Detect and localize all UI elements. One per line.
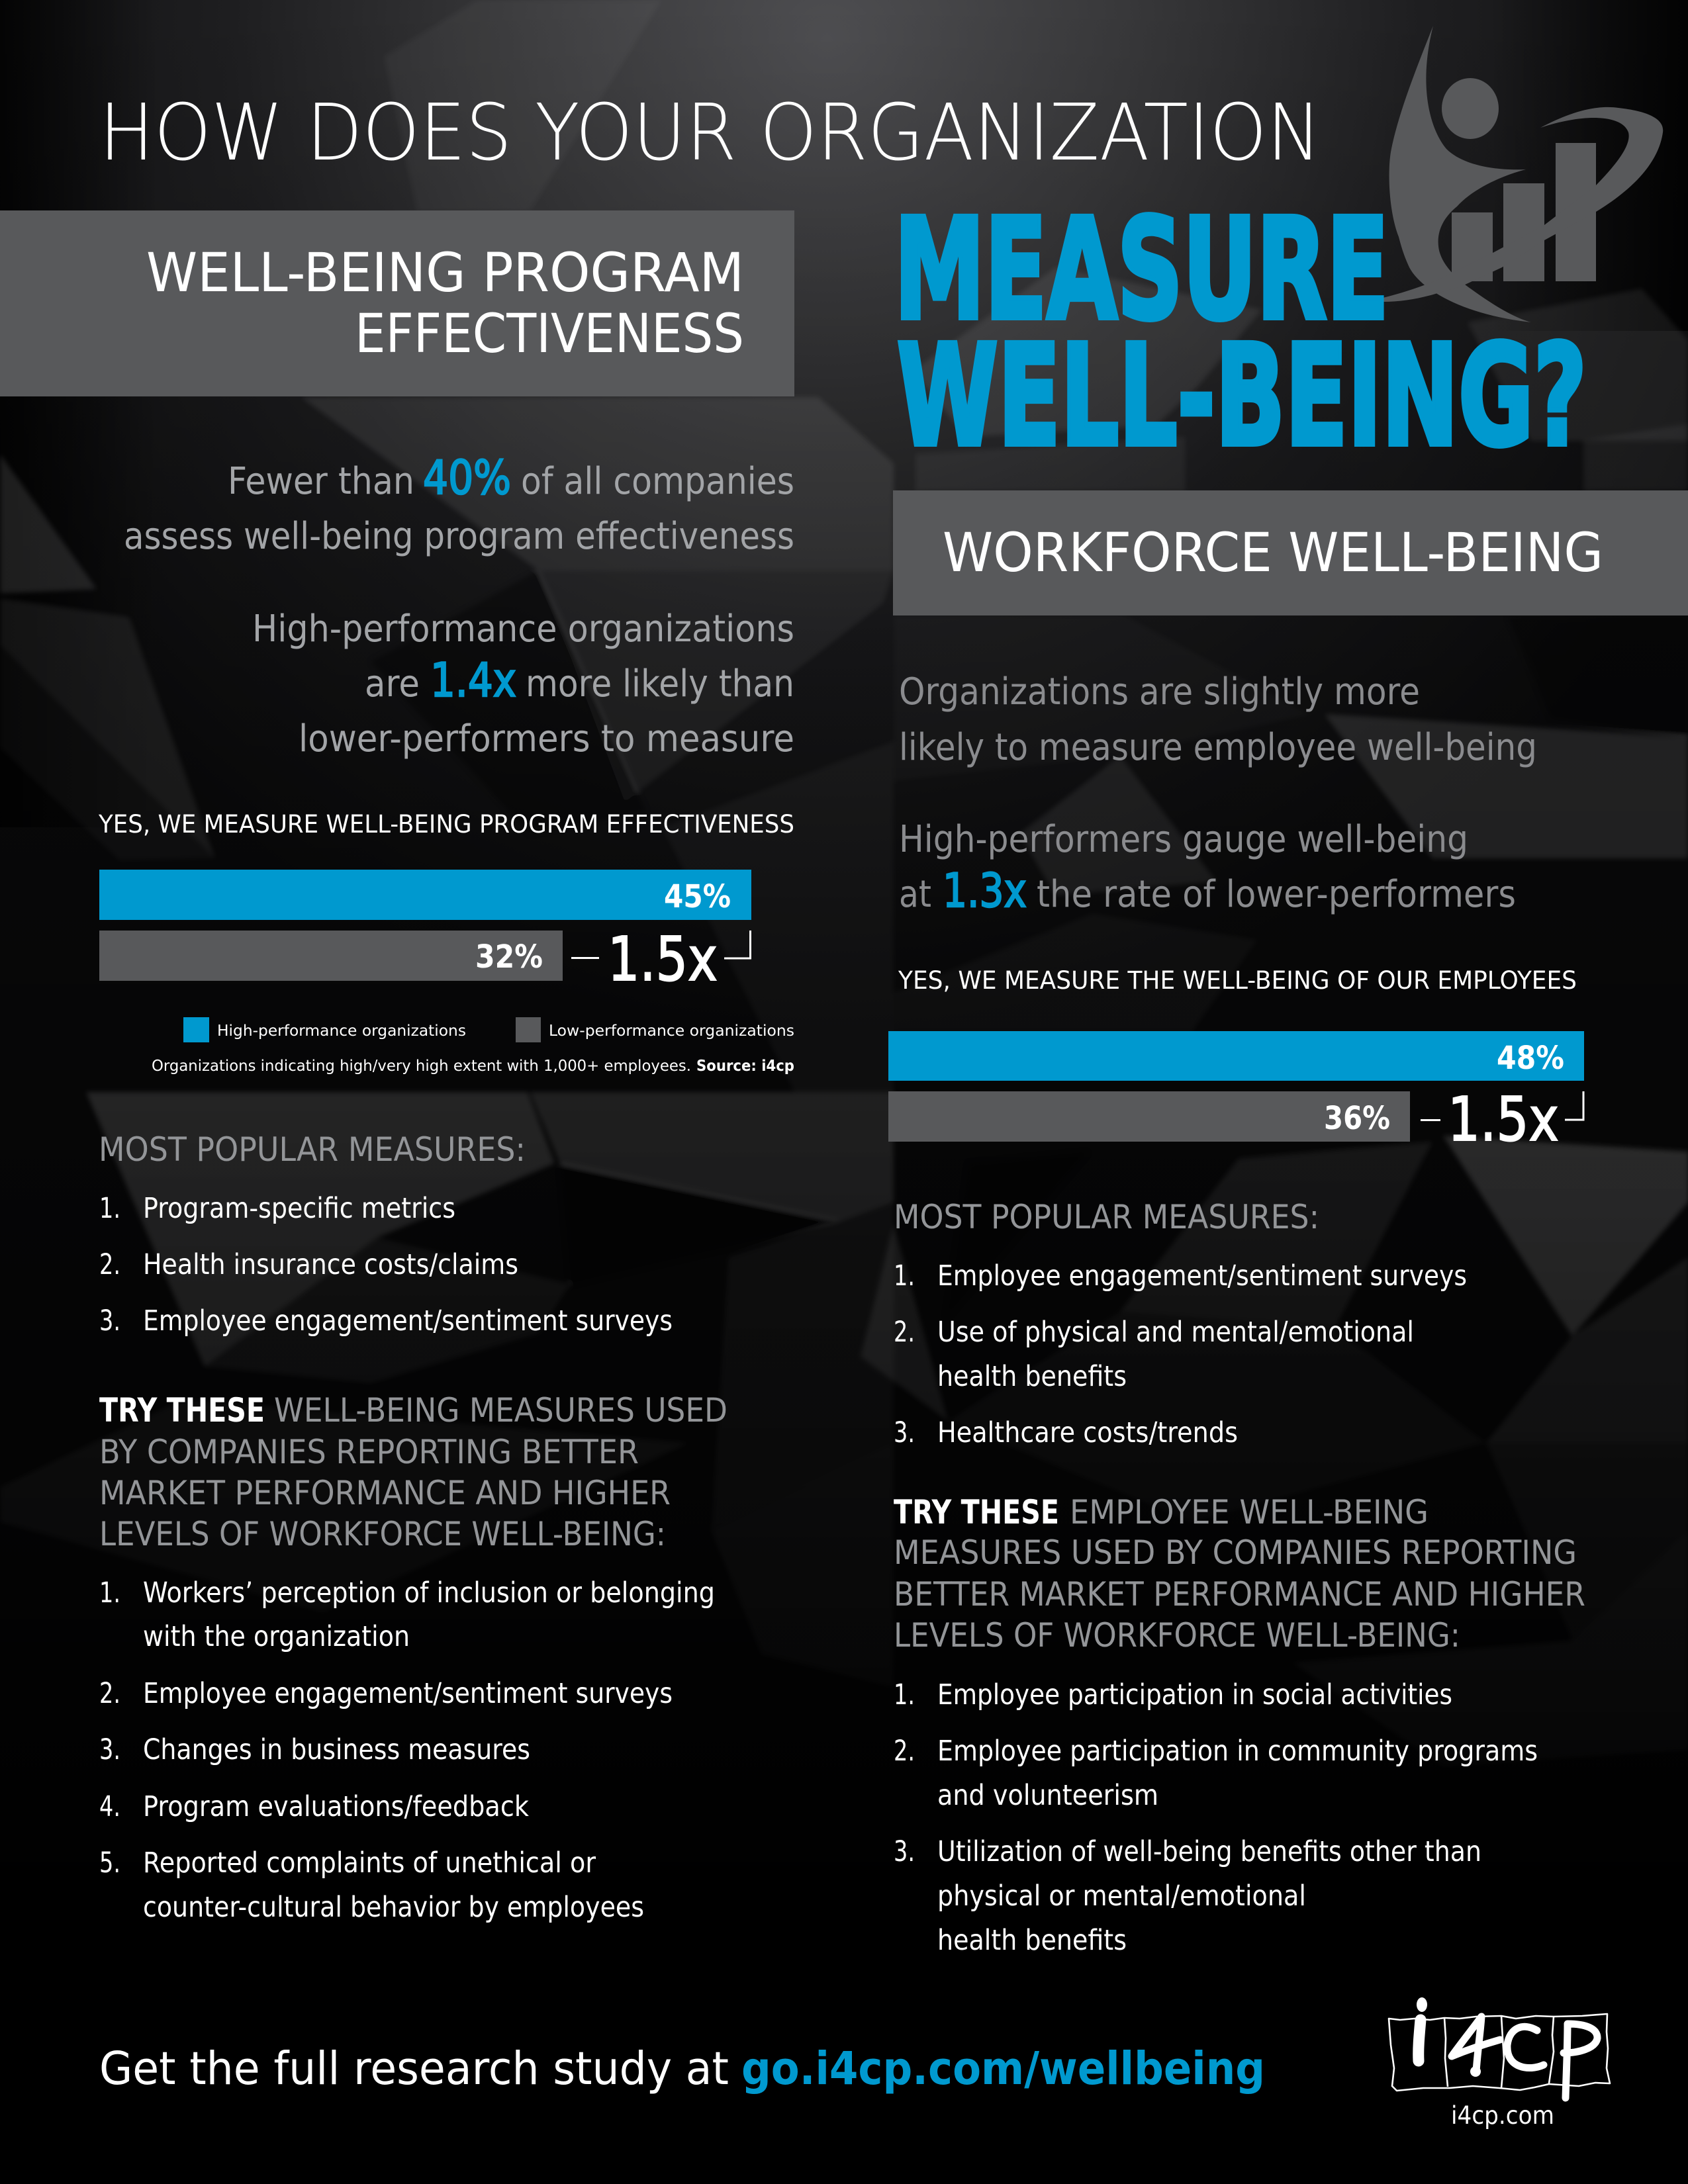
list: left most popular measures: MOST POPULAR MEASURES: bbox=[99, 1130, 526, 1169]
list: left try these measures: 1. bbox=[99, 1576, 120, 1610]
headline: measure well-being: MEASURE bbox=[894, 189, 1389, 351]
panel: right heading band bbox=[893, 490, 1688, 615]
list: left try these measures: WELL-BEING MEASURES USED bbox=[274, 1391, 727, 1430]
list: left try these measures: TRY THESE bbox=[99, 1391, 265, 1430]
headline: measure well-being bbox=[894, 189, 1587, 477]
legend and source note: Organizations indicating high/very high extent with 1,000+ employees. bbox=[152, 1058, 691, 1075]
call to action: research study link: Get the full research study at bbox=[99, 2042, 729, 2095]
background: dark low-poly texture bbox=[0, 0, 1688, 1694]
bar chart: well-being program effectiveness bbox=[98, 810, 794, 995]
list: right most popular measures: health benefits bbox=[937, 1360, 1127, 1393]
bar chart: employee well-being bbox=[888, 966, 1584, 1155]
list: left most popular measures: 3. bbox=[99, 1304, 120, 1338]
bar chart: well-being program effectiveness: 45% bbox=[664, 878, 731, 915]
list: right try these measures: 3. bbox=[894, 1835, 915, 1868]
text block: left intro statistics: assess well-being program effectiveness bbox=[124, 515, 794, 558]
list: left most popular measures: Program-specific metrics bbox=[143, 1192, 455, 1225]
text block: left intro statistics bbox=[124, 451, 794, 760]
list: left try these measures: 5. bbox=[99, 1846, 120, 1880]
list: right try these measures: Employee participation in social activities bbox=[937, 1678, 1452, 1711]
text block: left intro statistics: Fewer than bbox=[228, 460, 414, 503]
text block: left intro statistics: are bbox=[365, 662, 420, 705]
list: right most popular measures: Use of physical and mental/emotional bbox=[937, 1316, 1414, 1349]
list: left most popular measures bbox=[99, 1130, 673, 1338]
list: right try these measures: 1. bbox=[894, 1678, 915, 1711]
list: left try these measures: Reported complaints of unethical or bbox=[143, 1846, 596, 1880]
legend and source note: Source: i4cp bbox=[696, 1058, 794, 1075]
list: left try these measures: with the organization bbox=[143, 1620, 410, 1653]
call to action: research study link: go.i4cp.com/wellbeing bbox=[741, 2042, 1265, 2095]
text block: right intro statistics: the rate of lower-performers bbox=[1037, 873, 1516, 916]
text block: left intro statistics: lower-performers to measure bbox=[299, 717, 794, 760]
list: right try these measures bbox=[894, 1493, 1585, 1957]
list: right most popular measures: 2. bbox=[894, 1316, 915, 1349]
text block: left intro statistics: 1.4x bbox=[430, 653, 516, 707]
bar chart: employee well-being: YES, WE MEASURE THE WELL-BEING OF OUR EMPLOYEES bbox=[898, 966, 1577, 995]
list: right try these measures: and volunteerism bbox=[937, 1779, 1158, 1812]
legend and source note: Low-performance organizations bbox=[549, 1023, 794, 1040]
list: left try these measures: 4. bbox=[99, 1790, 120, 1823]
text block: left intro statistics: High-performance organizations bbox=[252, 608, 794, 651]
text block: right intro statistics: at bbox=[899, 873, 931, 916]
list: left try these measures: 3. bbox=[99, 1733, 120, 1766]
call to action: research study link bbox=[99, 2042, 1265, 2095]
bar chart: well-being program effectiveness: YES, WE MEASURE WELL-BEING PROGRAM EFFECTIVENESS bbox=[98, 810, 794, 839]
list: right try these measures: health benefits bbox=[937, 1924, 1127, 1957]
icon: i4cp figure and bars logo bbox=[1383, 26, 1663, 322]
list: left most popular measures: 1. bbox=[99, 1192, 120, 1225]
list: left most popular measures: Employee engagement/sentiment surveys bbox=[143, 1304, 673, 1338]
bar chart: employee well-being: 1.5x bbox=[1448, 1084, 1559, 1155]
list: right most popular measures: 1. bbox=[894, 1259, 915, 1293]
list: right try these measures: Utilization of well-being benefits other than bbox=[937, 1835, 1481, 1868]
list: right most popular measures: MOST POPULAR MEASURES: bbox=[894, 1198, 1319, 1236]
text block: right intro statistics: 1.3x bbox=[943, 864, 1027, 918]
list: left try these measures: LEVELS OF WORKFORCE WELL-BEING: bbox=[99, 1515, 666, 1553]
text block: right intro statistics bbox=[899, 670, 1537, 918]
list: left try these measures: Employee engagement/sentiment surveys bbox=[143, 1677, 673, 1710]
logo: i4cp: i4cp.com bbox=[1451, 2101, 1554, 2130]
list: left try these measures: MARKET PERFORMANCE AND HIGHER bbox=[99, 1474, 671, 1512]
list: right try these measures: TRY THESE bbox=[894, 1493, 1059, 1531]
list: right most popular measures: Employee engagement/sentiment surveys bbox=[937, 1259, 1467, 1293]
text block: left intro statistics: more likely than bbox=[526, 662, 794, 705]
bar chart: employee well-being: 36% bbox=[1324, 1100, 1390, 1137]
list: left try these measures: Workers’ perception of inclusion or belonging bbox=[143, 1576, 715, 1610]
list: left try these measures: BY COMPANIES REPORTING BETTER bbox=[99, 1433, 639, 1471]
text block: right intro statistics: High-performers gauge well-being bbox=[899, 818, 1468, 861]
panel: left heading band bbox=[0, 210, 794, 396]
text block: left intro statistics: 40% bbox=[423, 451, 511, 505]
title: how does your organization: HOW DOES YOUR ORGANIZATION bbox=[99, 87, 1321, 178]
list: right try these measures: MEASURES USED BY COMPANIES REPORTING bbox=[894, 1533, 1577, 1572]
panel: right heading band: WORKFORCE WELL-BEING bbox=[943, 522, 1603, 584]
list: right most popular measures: 3. bbox=[894, 1416, 915, 1449]
bar chart: well-being program effectiveness: 32% bbox=[475, 938, 543, 976]
panel: left heading band: WELL-BEING PROGRAM bbox=[146, 242, 744, 304]
list: left try these measures: 2. bbox=[99, 1677, 120, 1710]
list: right try these measures: EMPLOYEE WELL-BEING bbox=[1070, 1493, 1429, 1531]
list: right try these measures: physical or mental/emotional bbox=[937, 1880, 1306, 1913]
list: right try these measures: Employee participation in community programs bbox=[937, 1735, 1538, 1768]
logo: i4cp bbox=[1389, 1997, 1610, 2130]
legend and source note bbox=[152, 1017, 794, 1075]
list: left try these measures: Program evaluations/feedback bbox=[143, 1790, 529, 1823]
list: right most popular measures bbox=[894, 1198, 1467, 1449]
list: right try these measures: 2. bbox=[894, 1735, 915, 1768]
list: left try these measures bbox=[99, 1391, 727, 1924]
panel: left heading band: EFFECTIVENESS bbox=[355, 303, 744, 365]
legend and source note: High-performance organizations bbox=[217, 1023, 466, 1040]
list: right try these measures: BETTER MARKET PERFORMANCE AND HIGHER bbox=[894, 1575, 1585, 1614]
list: right try these measures: LEVELS OF WORKFORCE WELL-BEING: bbox=[894, 1616, 1460, 1655]
bar chart: well-being program effectiveness: 1.5x bbox=[608, 924, 718, 995]
list: left try these measures: Changes in business measures bbox=[143, 1733, 530, 1766]
list: left try these measures: counter-cultural behavior by employees bbox=[143, 1891, 644, 1924]
list: right most popular measures: Healthcare costs/trends bbox=[937, 1416, 1238, 1449]
list: left most popular measures: Health insurance costs/claims bbox=[143, 1248, 518, 1281]
bar chart: employee well-being: 48% bbox=[1497, 1040, 1564, 1077]
text block: left intro statistics: of all companies bbox=[521, 460, 794, 503]
list: left most popular measures: 2. bbox=[99, 1248, 120, 1281]
text block: right intro statistics: likely to measure employee well-being bbox=[899, 726, 1537, 769]
text block: right intro statistics: Organizations are slightly more bbox=[899, 670, 1420, 713]
